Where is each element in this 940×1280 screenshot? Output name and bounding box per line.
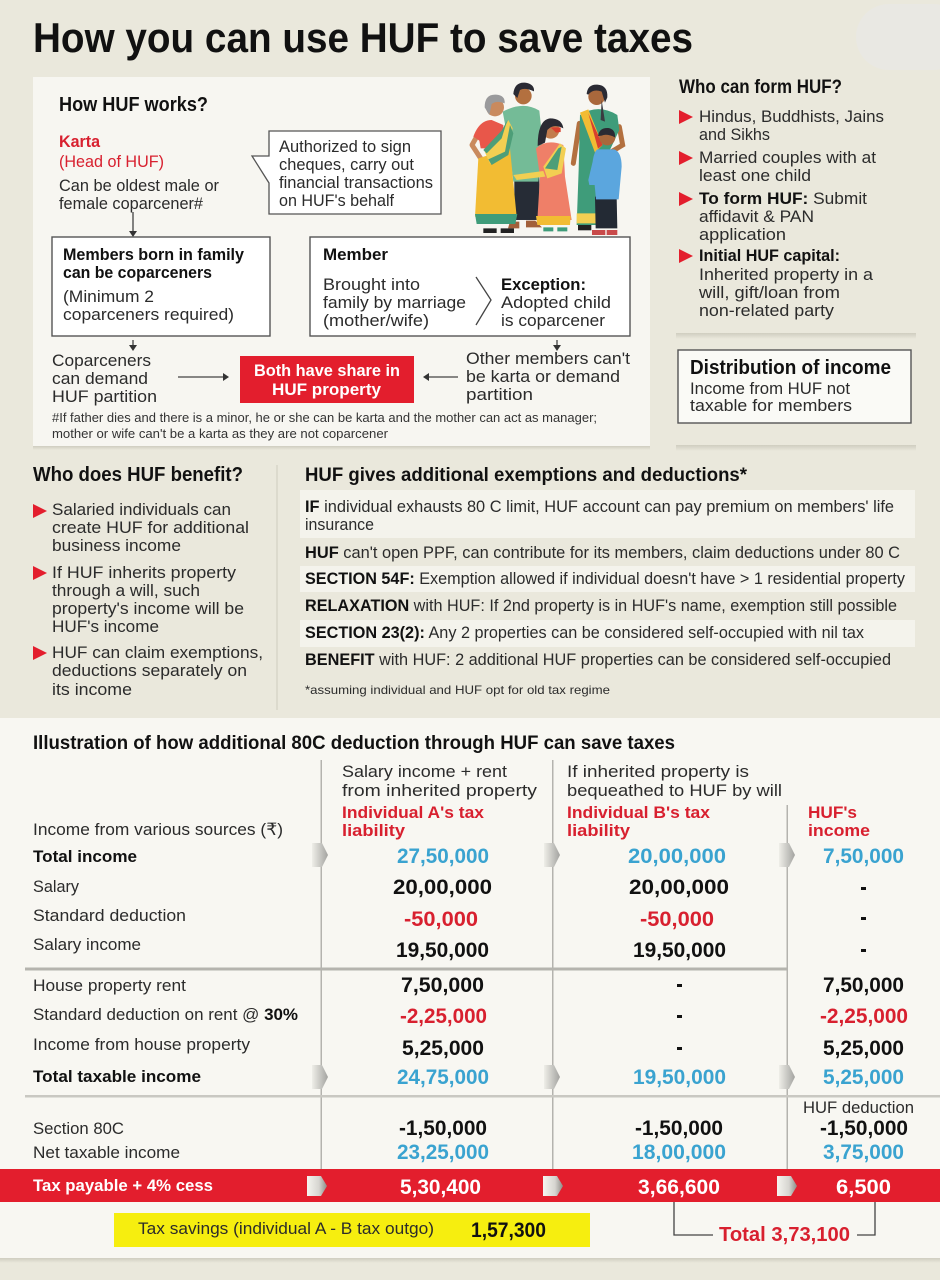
callout: both have share: Both have share in [254,361,400,380]
box: members born in family: coparceners required) [63,305,234,324]
callout: karta authority: Authorized to sign [279,137,411,156]
row: house property rent [33,973,904,997]
row: salary income [33,935,866,962]
bullet: eligible communities: Hindus, Buddhists, Jains [699,107,884,126]
bullet: married couples [679,148,876,185]
row: section 23(2): SECTION 23(2): Any 2 properties can be considered self-occupied with nil tax [305,623,864,642]
text: other members [466,349,630,404]
column header: individual B: liability [567,821,631,840]
row: total income: 20,00,000 [628,844,726,868]
panel: who does HUF benefit [33,464,263,699]
row: benefit: BENEFIT with HUF: 2 additional HUF properties can be considered self-occupied [305,650,891,669]
row: total taxable income [33,1065,904,1089]
column header: HUF income: HUF's [808,803,857,822]
box: member: is coparcener [501,311,605,330]
row: 80C limit: insurance [305,515,374,534]
heading: how HUF works: How HUF works? [59,94,208,116]
arrow: coparceners to property [178,373,229,381]
bullet: initial capital: Inherited property in a [699,265,874,284]
row: tax payable: 6,500 [836,1175,891,1199]
column header: HUF income [808,803,870,840]
box: members born in family: Members born in family [63,245,245,264]
text: karta [59,132,219,213]
box: members born in family [52,237,270,336]
callout: both have share: HUF property [272,380,382,399]
bullet: to form HUF [679,189,867,244]
box: distribution of income [678,350,911,423]
bullet: inherited property: through a will, such [52,581,200,600]
row: standard deduction on rent [33,1004,908,1028]
box: distribution of income: taxable for members [690,396,852,415]
text: karta: female coparcener# [59,194,204,213]
footnote: #If father dies and there is a minor, he or she can be karta and the mother can act as manager; [52,410,597,425]
row: section 80C: -1,50,000 [399,1116,487,1140]
row: income from house property [33,1035,904,1060]
woman right [573,85,623,230]
callout: tax savings: Tax savings (individual A - B tax outgo) [138,1219,434,1238]
panel: exemptions and deductions [300,465,915,697]
text: karta: Can be oldest male or [59,176,219,195]
bullet: initial capital: non-related party [699,301,835,320]
bullet: salaried individuals: business income [52,536,181,555]
row: income from house property: Income from house property [33,1035,251,1054]
row: standard deduction on rent: -2,25,000 [400,1004,487,1028]
bullet: inherited property: property's income will be [52,599,244,618]
bullet: salaried individuals [33,500,249,555]
row: tax payable: Tax payable + 4% cess [33,1176,213,1195]
box: member [310,237,630,336]
row: total taxable income: 5,25,000 [823,1065,904,1089]
column header: individual A: Individual A's tax [342,803,485,822]
bullet: exemptions: its income [52,680,132,699]
row: total income: 27,50,000 [397,844,489,868]
row: salary [33,875,866,899]
footnote [52,410,597,441]
bullet: salaried individuals: Salaried individuals can [52,500,231,519]
bullet: exemptions: HUF can claim exemptions, [52,643,263,662]
box: member: Member [323,245,388,264]
row: house property rent: House property rent [33,976,186,995]
row: total taxable income: 24,75,000 [397,1065,489,1089]
bullet: eligible communities: and Sikhs [699,125,770,144]
bullet: married couples: Married couples with at [699,148,876,167]
row: salary income: 19,50,000 [396,938,489,962]
text: coparceners can demand partition [52,351,157,406]
text: karta: Karta [59,132,101,151]
row: net taxable income: 18,00,000 [632,1140,726,1164]
bullet: salaried individuals: create HUF for additional [52,518,249,537]
column header: individual A: liability [342,821,406,840]
row: section 80C: HUF deduction [803,1098,914,1117]
box: member: Adopted child [501,293,611,312]
note: old tax regime: *assuming individual and HUF opt for old tax regime [305,683,610,697]
callout: karta authority: on HUF's behalf [279,191,394,210]
panel: who can form HUF [679,77,884,320]
box: member: Brought into [323,275,420,294]
row: section 80C: -1,50,000 [820,1116,908,1140]
text: other members: partition [466,385,533,404]
bullet: inherited property [33,563,244,636]
box: member: (mother/wife) [323,311,429,330]
bullet: inherited property: HUF's income [52,617,159,636]
row: standard deduction on rent: -2,25,000 [820,1004,908,1028]
callout: total bracket: Total 3,73,100 [719,1224,850,1246]
callout: tax savings: 1,57,300 [471,1218,546,1242]
row: section 80C [33,1098,914,1140]
box: distribution of income: Income from HUF not [690,379,850,398]
row: net taxable income: 3,75,000 [823,1140,904,1164]
bullet: initial capital: Initial HUF capital: [699,246,840,265]
row: net taxable income [33,1140,904,1164]
row: salary: 20,00,000 [629,875,729,899]
row: salary: 20,00,000 [393,875,492,899]
row: salary income: 19,50,000 [633,938,726,962]
heading: exemptions and deductions: HUF gives additional exemptions and deductions* [305,465,748,486]
text: coparceners can demand partition: Coparceners [52,351,151,370]
row: relaxation: RELAXATION with HUF: If 2nd property is in HUF's name, exemption still possible [305,596,897,615]
row: total income: 7,50,000 [823,844,904,868]
row: salary income: Salary income [33,935,141,954]
row: salary: Salary [33,877,79,896]
column header: individual A: from inherited property [342,781,538,800]
bullet: initial capital: will, gift/loan from [698,283,840,302]
box: member: Exception: [501,275,586,294]
row: tax payable [0,1169,940,1202]
row: total taxable income: Total taxable income [33,1067,201,1086]
row: standard deduction: -50,000 [404,907,478,931]
heading: illustration: Illustration of how additional 80C deduction through HUF can save taxes [33,733,675,754]
row: standard deduction on rent: Standard deduction on rent @ 30% [33,1005,298,1024]
column header: individual B [567,762,782,840]
footnote: mother or wife can't be a karta as they are not coparcener [52,426,389,441]
text: coparceners can demand partition: can demand [52,369,148,388]
bullet: to form HUF: To form HUF: Submit [699,189,867,208]
bullet: exemptions: deductions separately on [52,661,247,680]
bullet: inherited property: If HUF inherits property [52,563,237,582]
row: tax payable: 5,30,400 [400,1175,481,1199]
row: net taxable income: 23,25,000 [397,1140,489,1164]
text: other members: Other members can't [466,349,630,368]
box: members born in family: can be coparceners [63,263,212,282]
bullet: married couples: least one child [699,166,811,185]
callout: tax savings [114,1213,590,1247]
row: income from house property: 5,25,000 [402,1036,484,1060]
callout: karta authority: cheques, carry out [279,155,414,174]
row: standard deduction: Standard deduction [33,906,186,925]
column header: HUF income: income [808,821,870,840]
icon: family illustration [472,83,623,235]
girl [513,118,572,231]
row: section 80C: -1,50,000 [635,1116,723,1140]
row: total income: Total income [33,847,137,866]
row: total taxable income: 19,50,000 [633,1065,726,1089]
text: karta: (Head of HUF) [59,152,164,171]
row: section 80C: Section 80C [33,1119,124,1138]
row: 80C limit: IF individual exhausts 80 C limit, HUF account can pay premium on members' life [305,497,894,516]
callout: karta authority: financial transactions [279,173,433,192]
arrow: member to other members [553,340,561,351]
row: income from house property: 5,25,000 [823,1036,904,1060]
text: coparceners can demand partition: HUF partition [52,387,157,406]
column header: individual B: bequeathed to HUF by will [567,781,782,800]
row: total income [33,843,904,868]
callout: both have share [240,356,414,403]
bullet: eligible communities [679,107,884,144]
bullet: to form HUF: application [699,225,786,244]
title: How you can use HUF to save taxes [33,14,693,61]
heading: who can form HUF: Who can form HUF? [679,77,842,98]
box: distribution of income: Distribution of income [690,357,891,379]
grandmother [472,95,517,233]
row: house property rent: 7,50,000 [823,973,904,997]
row: PPF: HUF can't open PPF, can contribute for its members, claim deductions under 80 C [305,543,900,562]
row: house property rent: 7,50,000 [401,973,484,997]
panel: how HUF works [33,77,650,450]
callout: karta authority [252,131,441,214]
text: other members: be karta or demand [466,367,620,386]
arrow: members to coparceners [129,340,137,351]
row header: income sources: Income from various sources (₹) [33,820,283,839]
box: members born in family: (Minimum 2 [63,287,154,306]
row: 80C limit [305,497,894,534]
arrow: karta to members [129,212,137,237]
row: standard deduction: -50,000 [640,907,714,931]
row: net taxable income: Net taxable income [33,1143,180,1162]
boy [588,128,622,235]
bullet: initial capital [679,246,874,320]
bullet: to form HUF: affidavit & PAN [699,207,814,226]
row: section 54F: SECTION 54F: Exemption allowed if individual doesn't have > 1 residential property [305,569,905,588]
row: tax payable: 3,66,600 [638,1175,720,1199]
callout: total bracket [674,1202,875,1246]
column header: individual B: Individual B's tax [567,803,711,822]
column header: individual B: If inherited property is [567,762,749,781]
heading: who does HUF benefit: Who does HUF benefit? [33,464,243,486]
box: member: family by marriage [323,293,466,312]
man [503,83,543,228]
bullet: exemptions [33,643,263,699]
row: standard deduction [33,906,866,931]
arrow: other members to property [423,373,458,381]
column header: individual A [342,762,538,840]
panel: illustration table [0,718,940,1263]
column header: individual A: Salary income + rent [342,762,507,781]
